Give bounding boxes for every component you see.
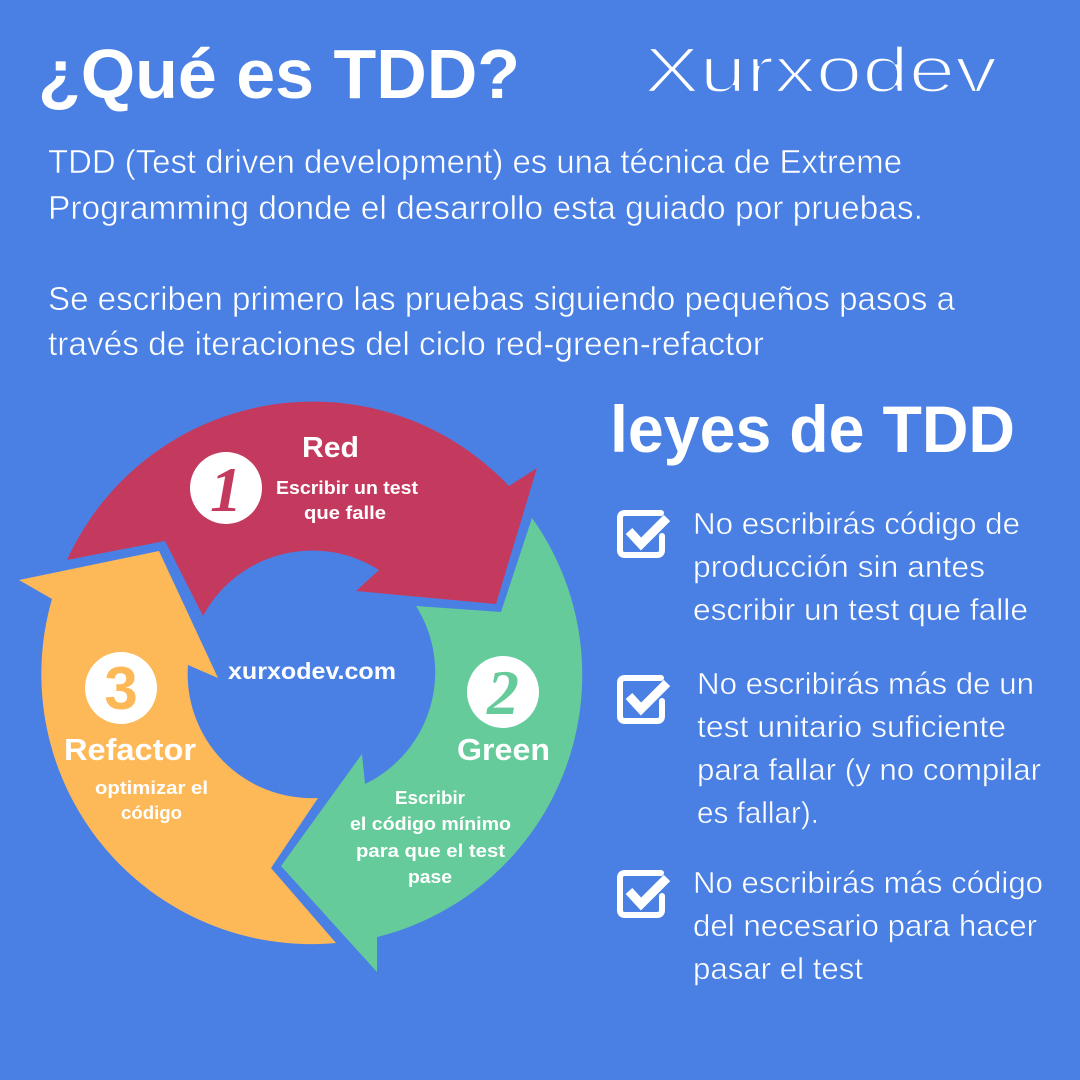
icon: checkbox: [620, 678, 667, 721]
law text: No escribirás más de un: [697, 666, 1034, 701]
intro text block: Programming donde el desarrollo esta guiado por pruebas.: [48, 189, 923, 226]
icon: checkbox: [620, 513, 667, 555]
law text: [693, 865, 1043, 986]
law text: escribir un test que falle: [693, 592, 1028, 627]
cycle diagram: [19, 402, 582, 972]
icon: number 3: 3: [104, 655, 138, 722]
law text: pasar el test: [693, 951, 863, 986]
law text: No escribirás código de: [693, 506, 1020, 541]
heading: leyes de TDD: leyes de TDD: [610, 392, 1015, 466]
intro text block: TDD (Test driven development) es una técnica de Extreme: [48, 143, 902, 180]
icon: number 1: 1: [210, 454, 242, 525]
law text: [697, 666, 1041, 830]
law text: No escribirás más código: [693, 865, 1043, 900]
law 3: [620, 865, 1043, 986]
arrow: green step: [281, 518, 582, 972]
icon: number 3: [85, 652, 157, 724]
green step content: [350, 656, 550, 887]
description: refactor: optimizar el: [95, 778, 208, 798]
icon: number 2: 2: [486, 657, 519, 728]
refactor step content: [64, 652, 208, 823]
description: red: que falle: [304, 503, 386, 523]
description: green: el código mínimo: [350, 814, 511, 834]
law text: producción sin antes: [693, 549, 985, 584]
law text: test unitario suficiente: [697, 709, 1006, 744]
description: green: Escribir: [395, 788, 465, 808]
description: red: [276, 478, 418, 523]
law 1: [620, 506, 1028, 627]
heading: Green: Green: [457, 732, 550, 767]
description: refactor: [95, 778, 208, 823]
center label: xurxodev.com: [228, 658, 396, 684]
icon: number 1: [190, 452, 262, 525]
intro text block: [48, 143, 956, 362]
red step content: [190, 432, 418, 525]
arrow: orange step: [19, 551, 336, 944]
title: ¿Qué es TDD?: [38, 35, 520, 113]
icon: checkbox: [620, 873, 667, 915]
law 2: [620, 666, 1041, 830]
icon: number 2: [467, 656, 539, 728]
description: red: Escribir un test: [276, 478, 418, 498]
law text: es fallar).: [697, 795, 819, 830]
law text: del necesario para hacer: [693, 908, 1037, 943]
logo: Xurxodev: Xurxodev: [644, 34, 997, 106]
description: refactor: código: [121, 803, 182, 823]
description: green: para que el test: [356, 841, 505, 861]
description: green: pase: [408, 867, 452, 887]
intro text block: través de iteraciones del ciclo red-green-refactor: [48, 325, 764, 362]
intro text block: Se escriben primero las pruebas siguiendo pequeños pasos a: [48, 280, 956, 317]
description: green: [350, 788, 511, 887]
law text: para fallar (y no compilar: [697, 752, 1041, 787]
heading: Refactor: Refactor: [64, 732, 196, 767]
law text: [693, 506, 1028, 627]
heading: Red: Red: [302, 432, 359, 464]
arrow: red step: [67, 402, 537, 616]
